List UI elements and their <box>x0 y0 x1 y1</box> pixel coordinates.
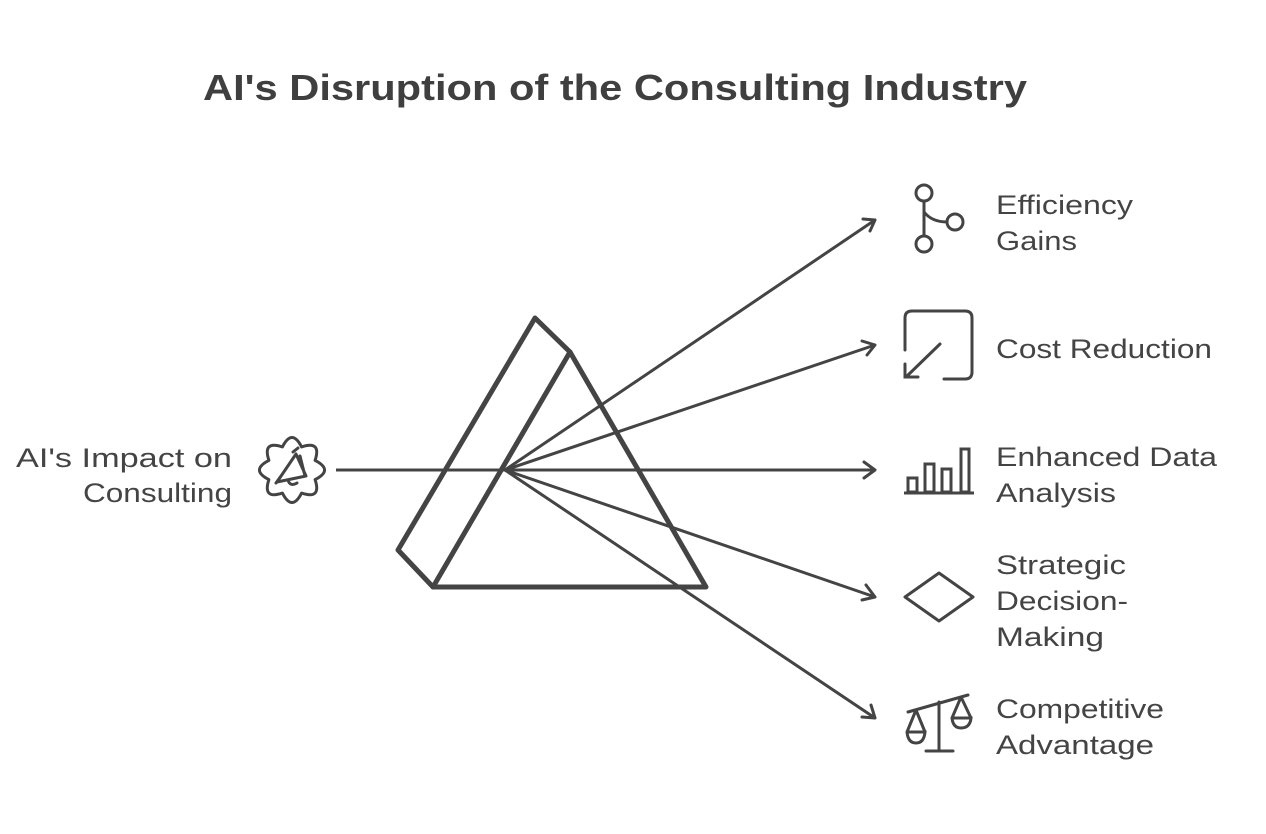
arrow: input beam <box>336 468 505 472</box>
label: efficiency: Gains <box>996 226 1077 256</box>
label: strategic: Decision- <box>996 586 1128 616</box>
label: cost reduction: Cost Reduction <box>996 334 1212 364</box>
label: competitive: Competitive <box>996 694 1164 724</box>
label: efficiency <box>996 190 1134 256</box>
label: competitive <box>996 694 1164 760</box>
icon: efficiency <box>916 185 963 252</box>
icon: bar chart <box>904 449 974 493</box>
input label <box>16 443 232 508</box>
label: strategic: Making <box>996 622 1104 652</box>
label: strategic: Strategic <box>996 550 1126 580</box>
label: data analysis <box>996 442 1218 508</box>
prism <box>398 318 706 587</box>
icon: gear megaphone <box>259 437 325 503</box>
icon: cost reduction <box>905 311 972 379</box>
arrows: rays <box>505 219 875 718</box>
icon: scales <box>907 695 971 751</box>
label: efficiency: Efficiency <box>996 190 1134 220</box>
label: data analysis: Analysis <box>996 478 1116 508</box>
label: strategic <box>996 550 1128 652</box>
input label: AI's Impact on <box>16 443 232 473</box>
title: AI's Disruption of the Consulting Industry <box>203 67 1027 108</box>
label: data analysis: Enhanced Data <box>996 442 1218 472</box>
label: competitive: Advantage <box>996 730 1154 760</box>
icon: diamond <box>905 573 973 621</box>
input label: Consulting <box>83 478 232 508</box>
